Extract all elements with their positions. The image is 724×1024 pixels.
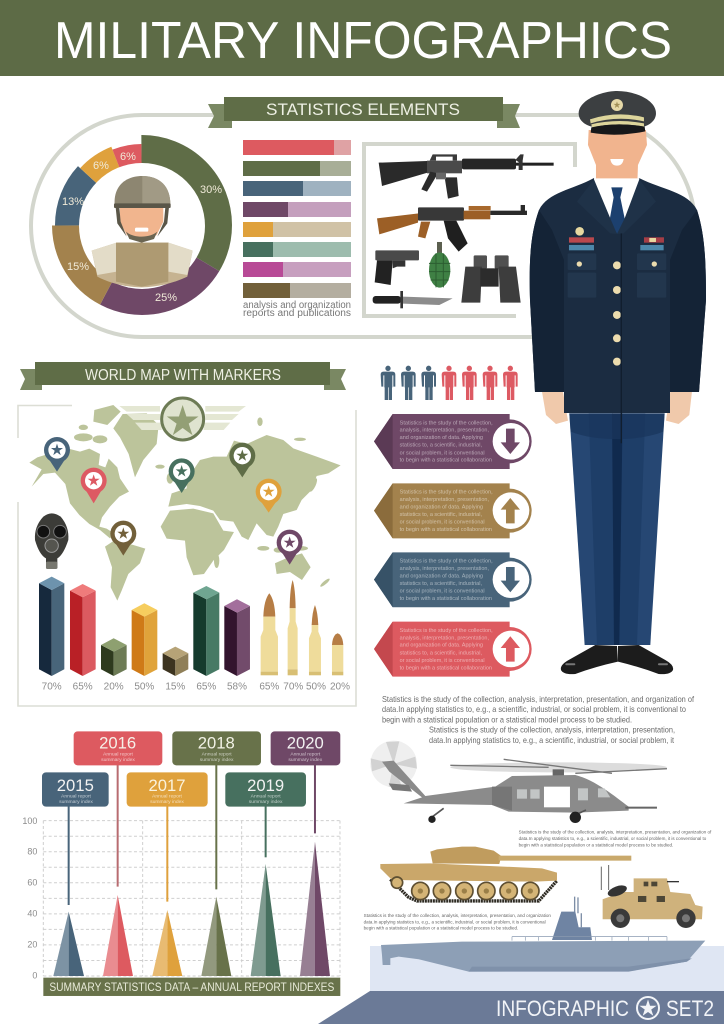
statistics elements ribbon: STATISTICS ELEMENTS: [266, 100, 460, 119]
map panel: [29, 398, 350, 692]
panel: blue down arrow: to begin with a statistical collaboration: [400, 596, 492, 602]
bar chart caption: analysis and organization: [243, 300, 351, 311]
year box 2019: [225, 772, 306, 807]
submarine: [381, 897, 705, 972]
icon: binoculars: [461, 255, 521, 303]
icon: grenade: [429, 242, 450, 288]
small caption: submarine: data.In applying statistics to, e.g., a scientific, industrial, or social problem, it is conventional: [364, 919, 546, 925]
timeline connectors: [69, 765, 315, 905]
paragraph text block: [382, 694, 695, 745]
panel: red up arrow: statistics to, a scientific, industrial,: [400, 650, 482, 656]
year box 2016: 2016: [99, 733, 136, 752]
bar chart caption: reports and publications: [243, 308, 351, 319]
officer head: [588, 130, 647, 185]
weapons frame: [364, 142, 575, 316]
year box 2017: Annual report: [152, 794, 183, 800]
medals and ribbons: [569, 227, 664, 250]
bullets chart: [261, 580, 343, 675]
year box 2018: summary index: [200, 757, 234, 763]
panel: red up arrow: [374, 622, 532, 677]
year box 2015: Annual report: [61, 794, 92, 800]
panel: brown up arrow: to begin with a statistical collaboration: [400, 527, 492, 533]
officer legs and shoes: [542, 392, 692, 674]
world map: [29, 405, 341, 601]
paragraph text block: data.In applying statistics to, e.g., a scientific, industrial, or social problem, it: [429, 735, 675, 745]
year box 2015: 2015: [57, 776, 94, 795]
pockets: [568, 253, 666, 298]
people pictogram row: [381, 366, 518, 400]
map pin olive: [229, 443, 255, 477]
column and bullet percentages: 70%: [283, 681, 303, 692]
panel: brown up arrow: analysis, interpretation, presentation,: [400, 497, 489, 503]
column and bullet percentages: 20%: [330, 681, 350, 692]
year box 2018: [172, 731, 261, 765]
shirt and tie: [594, 178, 639, 220]
panel: blue down arrow: Statistics is the study of the collection,: [400, 559, 493, 565]
icon: gas mask: [35, 513, 68, 569]
year box 2018: Annual report: [202, 752, 232, 758]
triangle data bars: [53, 842, 330, 976]
map pin red: [81, 468, 107, 503]
year box 2020: 2020: [287, 733, 324, 752]
paragraph text block: begin with a statistical population or a statistical model process to be studied.: [382, 714, 632, 724]
y axis labels: 100: [22, 816, 37, 826]
year box 2017: [127, 772, 208, 807]
year box 2015: [42, 772, 109, 807]
panel: red up arrow: analysis, interpretation, presentation,: [400, 635, 489, 641]
horizontal bar chart: [243, 140, 351, 319]
column and bullet percentages: 70%: [42, 681, 62, 692]
panel: purple down arrow: Statistics is the study of the collection,: [400, 420, 493, 426]
panel: purple down arrow: statistics to, a scientific, industrial,: [400, 443, 482, 449]
year box 2015: summary index: [59, 799, 93, 805]
title banner: MILITARY INFOGRAPHICS: [54, 12, 672, 70]
panel: red up arrow: Statistics is the study of the collection,: [400, 628, 493, 634]
map pin brown: [110, 521, 136, 556]
summary caption band: SUMMARY STATISTICS DATA – ANNUAL REPORT INDEXES: [49, 980, 334, 994]
panel: blue down arrow: and organization of data. Applying: [400, 573, 483, 579]
weapons set: [373, 154, 554, 308]
small caption: submarine: begin with a statistical population or a statistical model process to be studied.: [364, 926, 518, 932]
donut chart: 25%: [155, 292, 177, 304]
y axis labels: 20: [27, 940, 37, 950]
statistics elements ribbon: [208, 97, 520, 128]
small caption: helicopter: [519, 830, 712, 848]
small caption: helicopter: data.In applying statistics to, e.g., a scientific, industrial, or social problem, it is conventional to: [519, 836, 707, 842]
column and bullet percentages: 50%: [306, 681, 326, 692]
column and bullet percentages: 15%: [165, 681, 185, 692]
donut chart: 13%: [62, 196, 84, 208]
donut chart: [62, 151, 222, 304]
panel: brown up arrow: and organization of data. Applying: [400, 504, 483, 510]
small caption: submarine: Statistics is the study of the collection, analysis, interpretation, presentation, and organization: [364, 913, 551, 919]
arrow text panels: [374, 414, 532, 677]
y axis labels: 40: [27, 909, 37, 919]
paragraph text block: data.In applying statistics to, e.g., a scientific, industrial, or social problem, it is conventional to: [382, 704, 686, 714]
map panel frame: [18, 406, 356, 706]
infographic set label: INFOGRAPHIC: [496, 996, 629, 1021]
title banner: [0, 0, 724, 76]
statistics section outline: [31, 115, 695, 337]
officer jacket: [530, 178, 706, 413]
y axis labels: 0: [32, 971, 37, 981]
y axis labels: 80: [27, 847, 37, 857]
world map ribbon: WORLD MAP WITH MARKERS: [85, 367, 281, 384]
vehicles: [364, 741, 712, 972]
icon: assault rifle AK: [377, 205, 527, 252]
soldier portrait: [92, 176, 193, 287]
small caption: helicopter: begin with a statistical population or a statistical model process to be studied.: [519, 842, 673, 848]
infographic set label: SET2: [666, 996, 714, 1021]
map pin purple: [277, 530, 303, 565]
bottom band and water: [318, 946, 724, 1024]
small caption: helicopter: Statistics is the study of the collection, analysis, interpretation, presentation, and organization of: [519, 830, 712, 836]
y axis labels: [22, 816, 37, 981]
panel: purple down arrow: analysis, interpretation, presentation,: [400, 428, 489, 434]
emblem with wings: [119, 398, 246, 440]
small caption: submarine: [364, 913, 551, 932]
map pin teal: [169, 458, 195, 493]
icon: pistol: [375, 250, 419, 285]
chart grid: [43, 821, 340, 976]
3D column chart: [39, 577, 250, 676]
summary caption band: [43, 978, 340, 996]
officer figure: [530, 91, 706, 674]
panel: blue down arrow: or social problem, it is conventional: [400, 589, 485, 595]
year box 2017: summary index: [150, 799, 184, 805]
donut chart: 6%: [93, 160, 109, 172]
panel: brown up arrow: or social problem, it is conventional: [400, 520, 485, 526]
paragraph text block: Statistics is the study of the collection, analysis, interpretation, presentation,: [429, 724, 675, 734]
panel: blue down arrow: statistics to, a scientific, industrial,: [400, 581, 482, 587]
panel: red up arrow: and organization of data. Applying: [400, 643, 483, 649]
map pin blue: [44, 437, 70, 472]
panel: blue down arrow: analysis, interpretation, presentation,: [400, 566, 489, 572]
year box 2019: Annual report: [251, 794, 281, 800]
panel: red up arrow: or social problem, it is conventional: [400, 658, 485, 664]
icon: combat knife: [373, 291, 453, 308]
year box 2020: Annual report: [290, 752, 321, 758]
column and bullet percentages: [42, 681, 350, 692]
buttons: [577, 261, 657, 366]
year box 2020: summary index: [288, 757, 323, 763]
donut chart: 15%: [67, 261, 89, 273]
hands: [542, 392, 568, 424]
panel: purple down arrow: and organization of data. Applying: [400, 435, 483, 441]
year box 2019: 2019: [247, 776, 284, 795]
column and bullet percentages: 50%: [134, 681, 154, 692]
annual report timeline chart: [22, 731, 340, 996]
world map ribbon: [20, 362, 346, 390]
year box 2016: summary index: [101, 757, 135, 763]
helicopter: [370, 741, 667, 823]
column and bullet percentages: 65%: [196, 681, 216, 692]
panel: brown up arrow: [374, 483, 532, 538]
year box 2016: Annual report: [103, 752, 134, 758]
bar chart caption: [243, 300, 351, 319]
year box 2017: 2017: [148, 776, 186, 795]
donut chart: 30%: [200, 184, 222, 196]
column and bullet percentages: 20%: [104, 681, 124, 692]
panel: purple down arrow: or social problem, it is conventional: [400, 450, 485, 456]
icon: assault rifle M16: [379, 154, 554, 199]
year box 2019: summary index: [249, 799, 283, 805]
donut chart: 6%: [120, 151, 136, 163]
icon: star badge: [637, 997, 659, 1019]
panel: brown up arrow: Statistics is the study of the collection,: [400, 490, 493, 496]
y axis labels: 60: [27, 878, 37, 888]
armoured car: [601, 865, 703, 928]
peaked cap: [579, 91, 656, 127]
panel: brown up arrow: statistics to, a scientific, industrial,: [400, 512, 482, 518]
panel: purple down arrow: [374, 414, 532, 469]
year box 2016: [74, 731, 162, 765]
panel: purple down arrow: to begin with a statistical collaboration: [400, 458, 492, 464]
map pin orange: [256, 479, 282, 513]
column and bullet percentages: 58%: [227, 681, 247, 692]
tank: [380, 847, 631, 901]
year box 2018: 2018: [198, 733, 235, 752]
panel: blue down arrow: [374, 552, 532, 607]
column and bullet percentages: 65%: [73, 681, 93, 692]
panel: red up arrow: to begin with a statistical collaboration: [400, 665, 492, 671]
year box 2020: [271, 731, 340, 765]
column and bullet percentages: 65%: [259, 681, 279, 692]
